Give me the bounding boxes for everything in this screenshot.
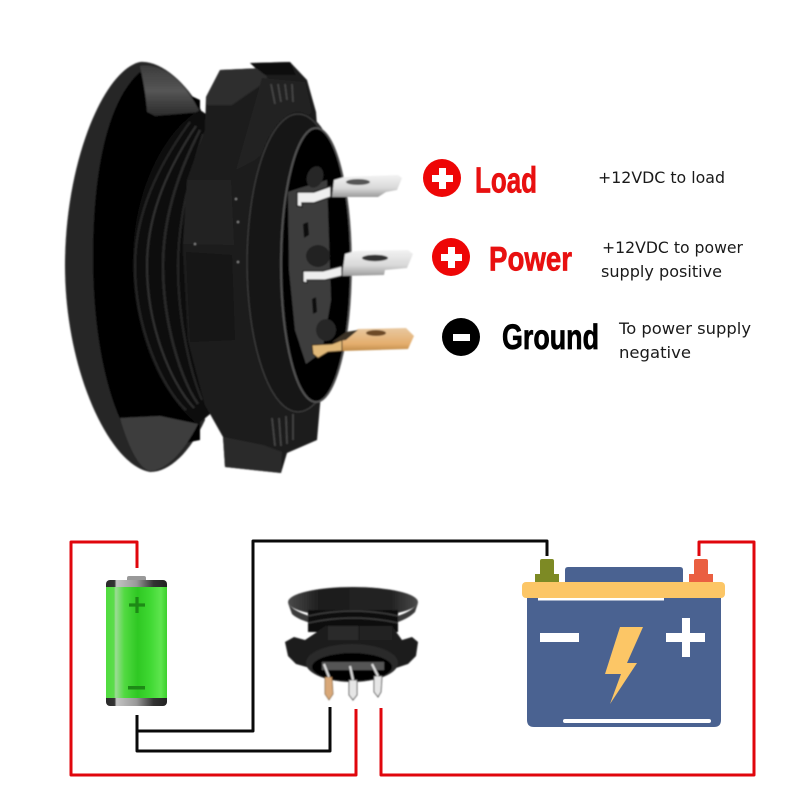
negative terminal [535,559,559,582]
heading: ground: Ground [502,318,599,357]
battery body [527,596,721,727]
label: power [432,238,572,278]
icon: car battery [522,559,725,727]
icon: power plus [432,238,470,276]
icon: ground minus [442,318,480,356]
battery lid [565,567,683,582]
small terminals [324,664,382,700]
rear flange [65,62,205,472]
heading: power: Power [489,240,572,278]
description: load: +12VDC to load [598,168,725,187]
hex nut [183,62,330,473]
threaded neck [133,110,215,424]
description: ground: negative [619,343,691,362]
battery minus [540,633,579,642]
icon: green battery cell [106,576,167,706]
terminal plate [288,164,336,364]
description: ground: To power supply [618,319,751,338]
icon: load plus [423,159,461,197]
terminal: power [303,250,413,283]
icon: small switch socket [285,587,418,700]
label: ground [442,318,599,357]
description: power: supply positive [601,262,722,281]
terminal: load [297,175,402,207]
battery top band [522,582,725,598]
terminal: ground [312,328,414,358]
wiring diagram wires [71,541,754,775]
heading: load: Load [475,160,537,200]
battery plus [666,618,705,657]
positive terminal [689,559,713,582]
description: power: +12VDC to power [602,238,743,257]
lightning bolt [605,627,643,704]
label: load [423,159,537,200]
product photo: switch socket [65,62,414,473]
front ring [245,112,351,414]
